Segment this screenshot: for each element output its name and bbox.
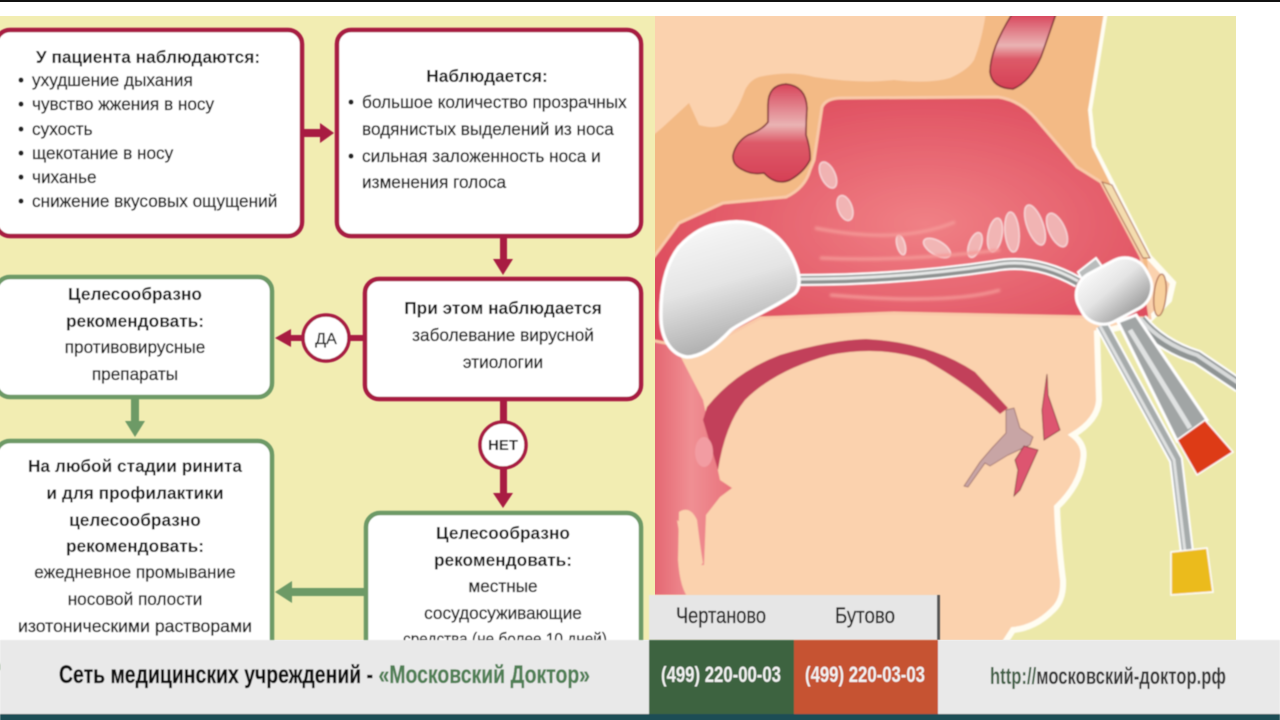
box: viral aetiology: При этом наблюдается bbox=[404, 298, 602, 318]
phone: Chertanovo: (499) 220-00-03 bbox=[661, 662, 781, 687]
soft palate bbox=[703, 339, 1008, 470]
nasal cavity bbox=[650, 97, 1150, 350]
box: decongestant recommendation: Целесообразно bbox=[436, 523, 570, 543]
box: observed: сильная заложенность носа и bbox=[362, 146, 601, 166]
box: decongestant recommendation: средства (не более 10 дней) bbox=[403, 629, 607, 649]
box: observed: изменения голоса bbox=[362, 172, 507, 192]
box: any stage recommendation: ежедневное промывание bbox=[34, 562, 236, 582]
box: observed: • bbox=[348, 92, 354, 112]
box: antiviral recommendation bbox=[0, 277, 272, 397]
throat bbox=[655, 342, 732, 596]
box: patient symptoms: снижение вкусовых ощущений bbox=[32, 191, 277, 211]
box: patient symptoms: щекотание в носу bbox=[32, 143, 174, 163]
box: antiviral recommendation: препараты bbox=[92, 364, 178, 384]
catheter tubes bbox=[1100, 315, 1240, 552]
nose cartilage bbox=[1102, 182, 1150, 258]
face profile bbox=[640, 5, 1173, 650]
sphenoid sinus bbox=[733, 84, 810, 182]
box: viral aetiology: заболевание вирусной bbox=[412, 325, 594, 345]
box: observed: Наблюдается: bbox=[426, 66, 548, 86]
network title: Сеть медицинских учреждений - «Московский Доктор» bbox=[59, 661, 590, 689]
box: any stage recommendation: рекомендовать: bbox=[66, 536, 204, 556]
box: any stage recommendation: целесообразно bbox=[69, 510, 201, 530]
box: any stage recommendation: носовой полости bbox=[68, 589, 202, 609]
nostril rim bbox=[1152, 274, 1168, 316]
illustration background bbox=[1010, 16, 1236, 640]
box: observed bbox=[337, 30, 641, 236]
badge: yes: ДА bbox=[315, 331, 337, 348]
box: decongestant recommendation: рекомендовать: bbox=[434, 550, 572, 570]
label: Butovo: Бутово bbox=[835, 603, 895, 628]
box: antiviral recommendation: противовирусные bbox=[65, 337, 205, 357]
panel: district tab bbox=[649, 595, 940, 640]
box: patient symptoms: чувство жжения в носу bbox=[32, 94, 215, 114]
frontal sinus bbox=[990, 14, 1056, 89]
box: any stage recommendation bbox=[0, 441, 272, 671]
box: any stage recommendation: На любой стадии ринита bbox=[28, 456, 242, 476]
box: patient symptoms: • bbox=[18, 119, 24, 139]
box: decongestant recommendation bbox=[366, 513, 641, 673]
box: viral aetiology: этиологии bbox=[463, 352, 543, 372]
box: patient symptoms: У пациента наблюдаются: bbox=[36, 47, 260, 67]
catheter tube: shaft bbox=[798, 264, 1078, 282]
box: patient symptoms: • bbox=[18, 70, 24, 90]
arrow: symptoms to observed bbox=[303, 123, 334, 143]
box: decongestant recommendation: сосудосуживающие bbox=[424, 603, 582, 623]
box: patient symptoms: чиханье bbox=[32, 167, 97, 187]
phone: Chertanovo bbox=[649, 640, 794, 714]
box: patient symptoms: • bbox=[18, 94, 24, 114]
anterior balloon bbox=[1074, 255, 1154, 327]
box: observed: • bbox=[348, 146, 354, 166]
panel: flowchart background bbox=[0, 16, 655, 640]
box: patient symptoms: ухудшение дыхания bbox=[32, 70, 193, 90]
box: patient symptoms: сухость bbox=[32, 119, 93, 139]
box: observed: водянистых выделений из носа bbox=[362, 119, 614, 139]
box: antiviral recommendation: Целесообразно bbox=[68, 284, 202, 304]
box: patient symptoms: • bbox=[18, 167, 24, 187]
red cap bbox=[1177, 420, 1233, 475]
box: any stage recommendation: и для профилактики bbox=[46, 483, 224, 503]
phone: Butovo: (499) 220-03-03 bbox=[805, 662, 925, 687]
uvula tissue grey bbox=[964, 408, 1033, 487]
box: decongestant recommendation: местные bbox=[468, 576, 538, 596]
panel: flowchart bbox=[0, 30, 641, 673]
turbinate folds bbox=[815, 222, 1000, 299]
box: observed: большое количество прозрачных bbox=[362, 92, 627, 112]
arrow: antiviral to prevention bbox=[125, 397, 145, 437]
arrow: observed to viral bbox=[493, 236, 513, 275]
adenoid highlight bbox=[695, 437, 713, 467]
illustration: nasal cavity with balloon catheter bbox=[640, 5, 1240, 650]
arrow: yes branch bbox=[275, 315, 365, 361]
box: viral aetiology bbox=[365, 279, 641, 399]
mucus drops bbox=[816, 159, 1072, 262]
lip cut lower bbox=[1014, 446, 1038, 496]
phone: Butovo bbox=[794, 640, 938, 714]
throat peach cut bbox=[678, 510, 703, 600]
box: patient symptoms: • bbox=[18, 143, 24, 163]
arrow: no branch bbox=[480, 400, 526, 508]
panel: contact bar bbox=[0, 640, 1280, 720]
arrow: decongestants to prevention bbox=[275, 581, 364, 603]
box: patient symptoms bbox=[0, 30, 302, 236]
posterior balloon bbox=[661, 222, 799, 357]
box: patient symptoms: • bbox=[18, 191, 24, 211]
box: any stage recommendation: изотоническими растворами bbox=[18, 616, 252, 636]
box: antiviral recommendation: рекомендовать: bbox=[66, 311, 204, 331]
bone tissue bbox=[655, 16, 1148, 270]
badge: no: НЕТ bbox=[488, 437, 518, 454]
page top edge bbox=[0, 0, 1280, 2]
yellow cap bbox=[1171, 548, 1213, 595]
label: Chertanovo: Чертаново bbox=[676, 603, 766, 628]
lip cut upper bbox=[1042, 374, 1060, 440]
